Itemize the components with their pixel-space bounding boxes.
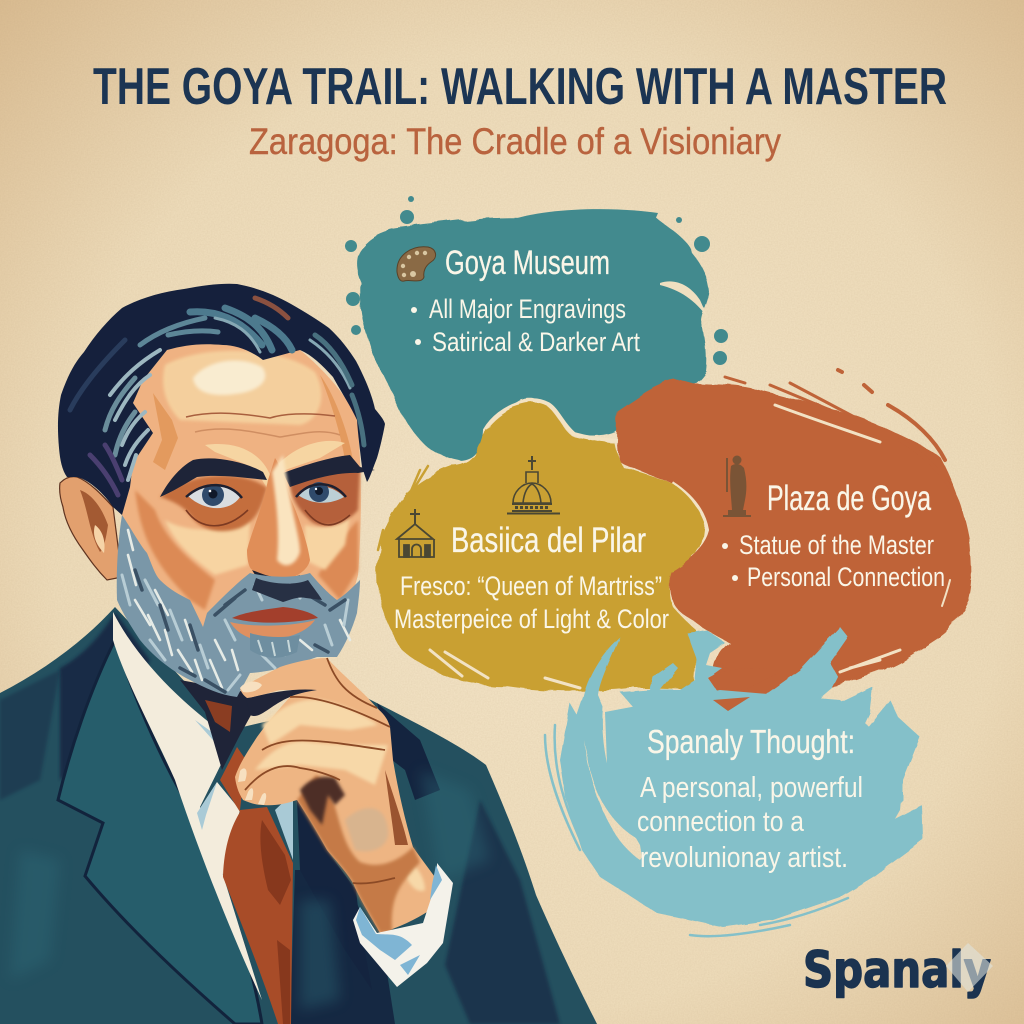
thumb shadow line bbox=[246, 689, 317, 716]
gold paint shape bbox=[376, 403, 705, 691]
bullet bbox=[415, 339, 421, 345]
finger lines bbox=[245, 658, 395, 883]
heading: Goya Museum: Goya Museum bbox=[445, 244, 610, 282]
icon: statue bbox=[723, 456, 751, 517]
text: fresco title: Fresco: “Queen of Martriss” bbox=[400, 571, 662, 601]
forehead pale band bbox=[163, 351, 321, 425]
heading and text: Basilica del Pilar bbox=[394, 456, 669, 634]
beard bbox=[117, 515, 360, 697]
orange paint shape bbox=[616, 381, 971, 693]
panel: orange paint blob, Plaza de Goya bbox=[616, 370, 971, 693]
cream brush gaps bbox=[775, 405, 950, 672]
dark collar shadow bbox=[180, 680, 262, 770]
beard pale blue strokes bbox=[122, 575, 348, 690]
text: personal connection: Personal Connection bbox=[747, 562, 945, 592]
hand back dark shading bbox=[385, 770, 408, 845]
soul patch bbox=[250, 633, 300, 658]
blue fill over the text area bbox=[605, 690, 905, 920]
logo diamond bbox=[946, 943, 993, 992]
mustache dark core bbox=[252, 578, 322, 602]
heading: Spanaly Thought: Spanaly Thought: bbox=[647, 723, 855, 760]
blue paint main body bbox=[560, 627, 923, 927]
suit jacket bbox=[0, 607, 597, 1024]
icon: dome bbox=[507, 456, 560, 514]
bullet bbox=[732, 575, 738, 581]
bullet bbox=[411, 307, 417, 313]
beard white strokes bbox=[128, 530, 350, 688]
left eye bbox=[186, 484, 248, 526]
shirt blue shadows bbox=[195, 720, 293, 860]
gold paint cream outline bbox=[460, 400, 707, 562]
shirt collar and front bbox=[113, 612, 262, 1000]
cuff blue shade bbox=[356, 865, 442, 975]
neck rust tone bbox=[205, 700, 232, 732]
forehead highlight bbox=[193, 360, 265, 395]
logo wordmark: Spanaly bbox=[803, 941, 991, 999]
panel: light blue paint swirl bbox=[545, 627, 923, 936]
lower lip bbox=[230, 620, 315, 640]
heading and text: Plaza de Goya bbox=[722, 456, 945, 592]
soul patch light bbox=[258, 640, 290, 656]
text: line one: A personal, powerful bbox=[640, 772, 863, 804]
temple painted shapes bbox=[153, 375, 355, 475]
right eye bbox=[296, 482, 350, 525]
orange tips over blue bbox=[708, 662, 780, 711]
cheek light bbox=[165, 515, 350, 575]
shirt cuff bbox=[353, 863, 453, 987]
wrist rust shading bbox=[297, 775, 420, 933]
suit dark shading bbox=[0, 612, 560, 1024]
nose bottom shadow bbox=[252, 570, 300, 586]
gold dry-brush flecks bbox=[378, 466, 580, 688]
portrait of Goya bbox=[0, 284, 597, 1024]
heading: Basilica del Pilar: Basiica del Pilar bbox=[451, 521, 646, 560]
text: line two: connection to a bbox=[637, 806, 805, 838]
text: masterpiece line: Masterpeice of Light & Color bbox=[394, 604, 669, 634]
cheek orange shading bbox=[135, 490, 358, 610]
beard dark strokes bbox=[135, 570, 345, 692]
hair bbox=[58, 284, 385, 515]
hand lighter facets bbox=[255, 700, 425, 891]
blue dry-brush streaks bbox=[545, 725, 848, 936]
bullet bbox=[722, 543, 728, 549]
left eye socket bbox=[160, 475, 267, 531]
shirt below knot bbox=[197, 782, 240, 875]
suit teal paint patches bbox=[10, 770, 490, 1010]
heading and text: Goya Museum bbox=[397, 244, 640, 357]
text: All Major Engravings: All Major Engravings bbox=[429, 294, 626, 324]
panel: teal paint blob, Goya Museum bbox=[345, 196, 728, 463]
subtitle: Zaragoga: The Cradle of a Visioniary bbox=[249, 121, 781, 162]
teal paint shape bbox=[356, 215, 709, 463]
right eyebrow bbox=[283, 455, 375, 487]
upper lip bbox=[232, 607, 318, 623]
right eye socket bbox=[290, 467, 360, 526]
text: line three: revolunionay artist. bbox=[640, 842, 848, 874]
jacket left lapel bbox=[58, 640, 262, 1024]
forehead wrinkles bbox=[186, 413, 335, 418]
icon: chapel bbox=[397, 509, 434, 557]
logo: Spanaly bbox=[803, 941, 993, 999]
brow ridge light bbox=[205, 441, 345, 490]
text: statue of the master: Statue of the Master bbox=[739, 530, 934, 560]
tie bbox=[220, 747, 293, 1024]
icon: artist palette bbox=[397, 247, 436, 281]
ear bbox=[60, 477, 122, 580]
teal paint splatter bbox=[345, 196, 728, 365]
thinking hand bbox=[235, 658, 437, 933]
left eyebrow bbox=[160, 458, 267, 497]
hair blue highlights bbox=[70, 298, 364, 495]
panel: gold paint blob, Basilica del Pilar bbox=[376, 400, 707, 691]
nose highlight bbox=[272, 455, 300, 565]
palm dark creases bbox=[300, 777, 345, 825]
heading: Plaza de Goya: Plaza de Goya bbox=[767, 479, 931, 518]
tie shading bbox=[260, 820, 291, 1024]
orange dry-brush streaks bbox=[725, 370, 960, 510]
nose shading bbox=[247, 458, 310, 581]
inner ear light bbox=[94, 525, 105, 553]
fingernails bbox=[238, 682, 266, 805]
back of hand muted tone bbox=[345, 808, 388, 851]
heading and text: Spanaly Thought bbox=[637, 723, 863, 874]
text: Satirical and Darker Art: Satirical & Darker Art bbox=[432, 327, 640, 357]
inner ear shadow bbox=[80, 490, 108, 552]
face skin bbox=[122, 340, 361, 660]
